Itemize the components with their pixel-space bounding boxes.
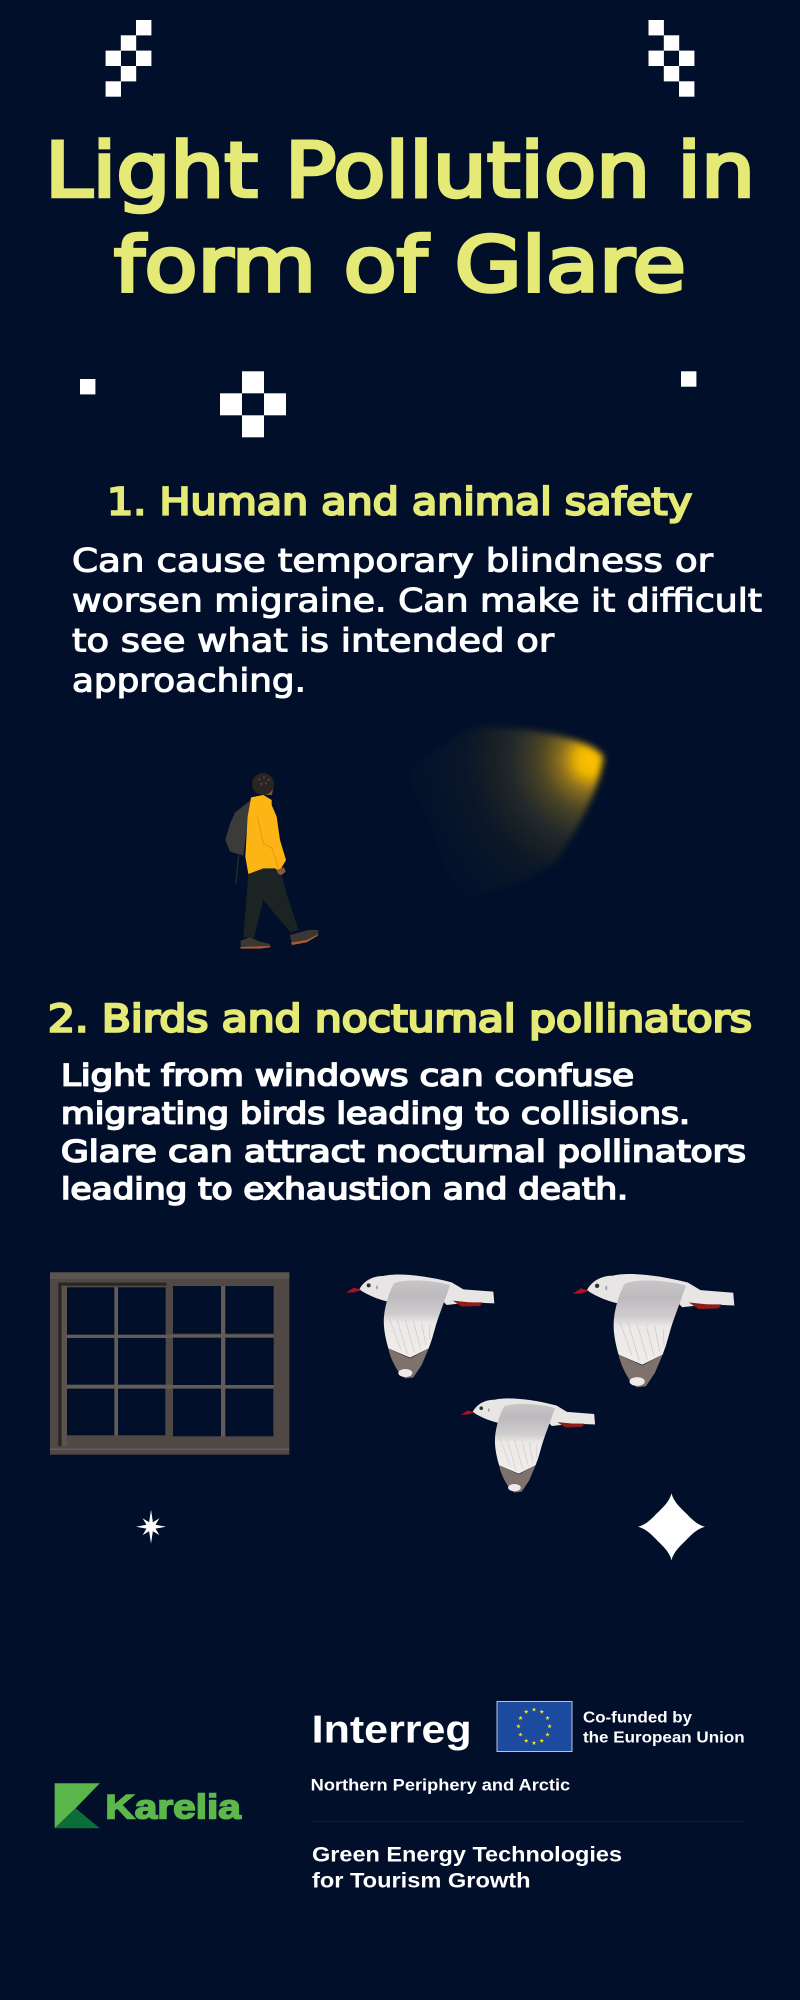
text block: birds description: Glare can attract nocturnal pollinators — [61, 1135, 746, 1169]
text: co-funded by the European Union: Co-funded by — [583, 1710, 692, 1727]
illustration: walking person — [225, 773, 319, 949]
text block: birds description: leading to exhaustion and death. — [61, 1172, 628, 1206]
text block: human safety description: Can cause temporary blindness or — [72, 542, 714, 580]
text block: birds description: migrating birds leading to collisions. — [61, 1096, 690, 1130]
illustration: street light glare — [406, 727, 603, 897]
text: project name: for Tourism Growth — [312, 1868, 530, 1892]
icon: large four point star — [638, 1493, 705, 1560]
icon: small eight point star — [136, 1510, 166, 1544]
text block: birds description: Light from windows can confuse — [61, 1059, 634, 1093]
icon: small pixel left — [80, 379, 95, 394]
text block: human safety description: worsen migraine. Can make it difficult — [72, 582, 762, 620]
heading: human and animal safety: 1. Human and animal safety — [107, 480, 692, 524]
heading: birds and nocturnal pollinators: 2. Birds and nocturnal pollinators — [48, 997, 752, 1041]
icon: pixel sparkle top right — [648, 20, 694, 97]
text: project name — [312, 1843, 622, 1892]
logo: Karelia: Karelia — [105, 1788, 242, 1826]
text block: human safety description: approaching. — [72, 662, 306, 700]
text: project name: Green Energy Technologies — [312, 1843, 622, 1867]
logo: Karelia — [55, 1783, 242, 1828]
icon: pixel cross sparkle — [220, 371, 286, 437]
illustration: window — [50, 1272, 289, 1455]
illustration: bird two — [572, 1274, 734, 1387]
text: programme name: Northern Periphery and Arctic — [311, 1777, 570, 1795]
illustration: bird one — [346, 1275, 494, 1378]
text block: human safety description: to see what is intended or — [72, 622, 555, 660]
logo: Interreg: Interreg — [312, 1709, 472, 1752]
text: co-funded by the European Union: the European Union — [583, 1730, 745, 1747]
text block: human safety description — [72, 542, 762, 700]
icon: small pixel right — [681, 371, 696, 387]
text block: birds description — [61, 1059, 746, 1206]
title: form of Glare — [114, 220, 686, 309]
illustration: bird three — [461, 1398, 595, 1492]
text: co-funded by the European Union — [583, 1710, 745, 1747]
title: Light Pollution in — [45, 126, 755, 215]
icon: pixel sparkle top left — [106, 20, 151, 97]
title — [45, 126, 755, 309]
icon: EU flag — [497, 1702, 572, 1752]
